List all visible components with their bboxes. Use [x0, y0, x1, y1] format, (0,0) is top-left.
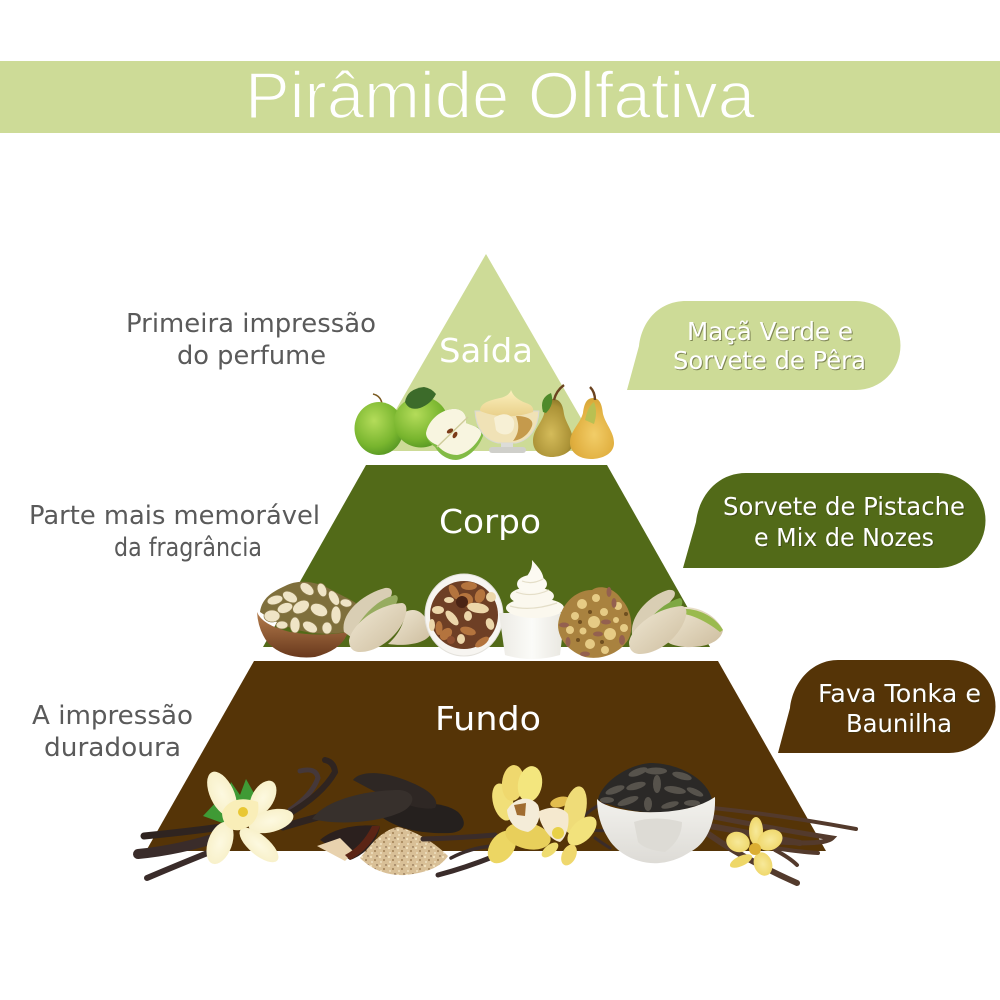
callout: base notes: Baunilha — [846, 709, 952, 738]
heading: Corpo: Corpo — [439, 502, 541, 541]
icon: apple half — [426, 409, 483, 460]
text: bottom level description — [32, 701, 193, 763]
callout: base notes: Fava Tonka e — [818, 679, 981, 708]
text: middle level description — [29, 501, 320, 563]
icon: green apple — [354, 394, 404, 455]
icon: vanilla pods left — [138, 760, 335, 878]
panel: pyramid top level — [372, 254, 600, 451]
icon: vanilla bundle right — [707, 808, 856, 883]
callout: top notes: Maçã Verde e — [687, 317, 853, 346]
icon: chopped nuts pile — [558, 587, 631, 658]
icon: open pistachio right — [629, 590, 723, 654]
text: top level description: do perfume — [177, 341, 326, 371]
text: top level description: Primeira impressão — [126, 309, 376, 339]
icon: pear sorbet glass — [475, 390, 539, 453]
text: middle level description: da fragrância — [114, 533, 262, 563]
icon: bowl of pistachios — [257, 580, 357, 657]
icon: small yellow orchid — [723, 817, 786, 878]
icon: tonka powder pile — [360, 827, 448, 875]
icon: vanilla pods center — [423, 802, 625, 875]
text: bottom level description: duradoura — [44, 733, 181, 763]
callout: top notes — [627, 301, 900, 390]
icon: tonka pods — [312, 773, 464, 861]
icon: open pistachio left — [343, 588, 431, 652]
callout: heart notes — [683, 473, 986, 568]
panel: pyramid bottom level — [146, 661, 826, 851]
icon: pear with leaf — [533, 385, 573, 457]
icon: vanilla flower white — [201, 767, 296, 868]
heading: Fundo: Fundo — [435, 699, 541, 738]
icon: yellow orchid — [482, 764, 602, 869]
icon: bowl of mixed nuts — [425, 574, 503, 656]
callout: base notes — [778, 660, 996, 753]
icon: frozen yogurt cup — [499, 560, 565, 659]
callout: heart notes: Sorvete de Pistache — [723, 492, 965, 521]
title band — [0, 58, 1000, 133]
callout: top notes: Sorvete de Pêra — [673, 346, 866, 375]
icon: green apple with leaf — [394, 387, 448, 448]
text: bottom level description: A impressão — [32, 701, 193, 731]
heading: Saída: Saída — [439, 331, 533, 370]
text: top level description — [126, 309, 376, 371]
text: middle level description: Parte mais memorável — [29, 501, 320, 531]
icon: bowl of tonka beans — [597, 763, 715, 863]
panel: pyramid middle level — [263, 465, 710, 647]
callout: heart notes: e Mix de Nozes — [754, 523, 934, 552]
title: Pirâmide Olfativa — [245, 58, 755, 132]
icon: yellow pear — [570, 387, 614, 459]
